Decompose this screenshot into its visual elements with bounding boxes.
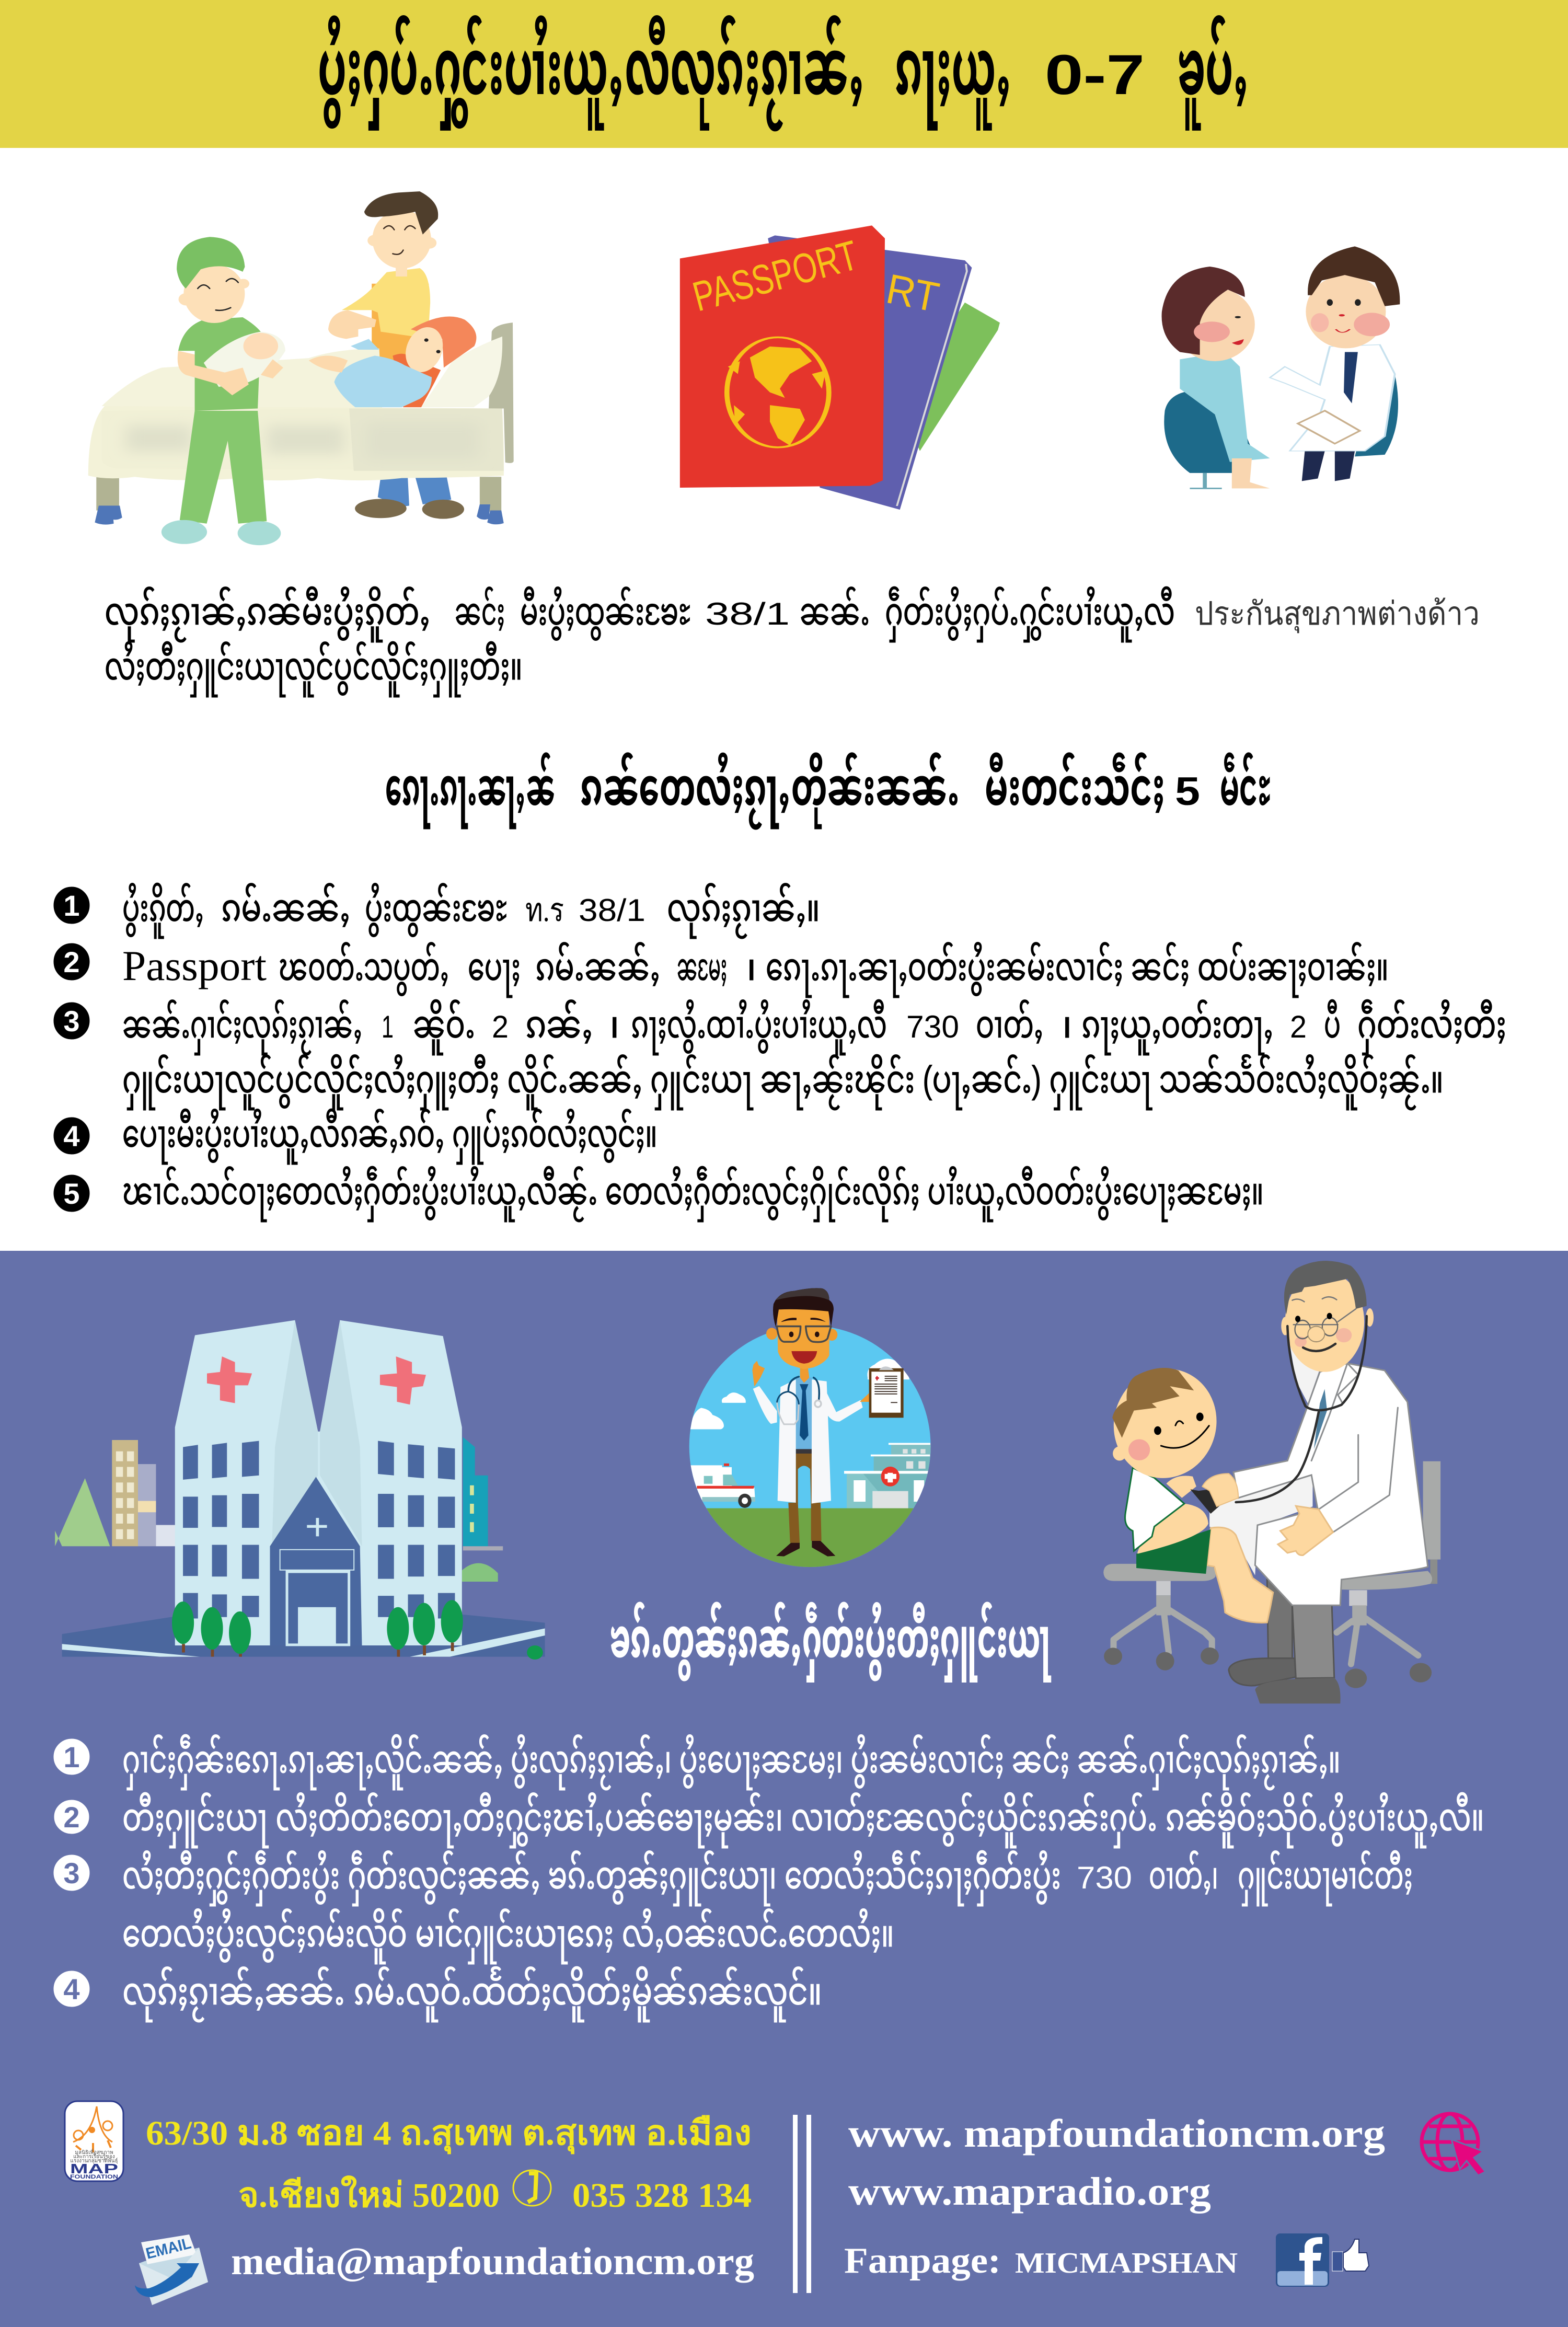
logo: MAP Foundation: FOUNDATION [70, 2174, 118, 2180]
text: RT [883, 265, 943, 321]
icon: email: EMAIL [144, 2234, 193, 2263]
step 3: 3 [63, 1857, 80, 1890]
item 2: 2 [63, 946, 80, 978]
websites [848, 2112, 1385, 2214]
logo: MAP Foundation: แรงงานกลุ่มชาติพันธุ์ [70, 2158, 118, 2164]
text block: intro paragraph: ႁဵတ်းပွႆႈႁပ်ႉႁွင်းပၢႆးယူႇလီ [885, 587, 1175, 642]
item 1: ท.ร [525, 893, 564, 928]
item 5 [54, 1167, 1264, 1222]
text block: intro paragraph: လႆႈတီႈႁူင်းယႃလူင်ပွင်လိူင်ႈႁူႈတီႈ။ [105, 642, 523, 697]
item 3: ၊ [1062, 1004, 1072, 1046]
divider [793, 2115, 811, 2293]
list: hospital steps [54, 1735, 1484, 2022]
step 3: လႆႈတီႈႁွင်ႈႁဵတ်းပွႆး ႁဵတ်းလွင်ႈၼၼ်ႇ ၶၵ်ႉတွၼ်ႈႁူင်းယႃ၊ တေလႆႈသဵင်ႈၵႃႈႁဵတ်းပွႆး [122, 1851, 1061, 1906]
title: ပွႆႈႁပ်ႉႁွင်းပၢႆးယူႇလီလုၵ်ႈၵႂၢၼ်ႇ [318, 14, 865, 132]
item 3: ၵႃႈလွႆႉထၢႆႉပွႆးပၢႆးယူႇလီ [631, 1000, 887, 1055]
item 4 [54, 1109, 658, 1164]
heading: documents required [385, 752, 1270, 830]
step 1 [54, 1735, 1341, 1790]
item 3: 1 [382, 1009, 394, 1044]
panel: title banner [0, 0, 1568, 148]
text block: intro paragraph: ၼင်ႈ [455, 587, 505, 633]
item 2: Passport [122, 942, 267, 989]
illustration: patient consulting doctor [1162, 246, 1400, 488]
item 2 [54, 942, 1389, 997]
title: ၵႃႈယူႇ [895, 23, 1012, 131]
icon: email [135, 2234, 208, 2305]
heading: documents required: ၵေႃႉၵႃႉၼႃႇၼ် [385, 752, 555, 830]
fanpage: Fanpage: [844, 2241, 1001, 2281]
logo: MAP Foundation: MAP [70, 2161, 118, 2176]
step 3: 730 [1077, 1860, 1132, 1895]
text block: intro paragraph: ประกันสุขภาพต่างด้าว [1195, 596, 1480, 633]
fanpage [844, 2241, 1238, 2281]
item 4: ပေႃးမီးပွႆးပၢႆးယူႇလီၵၼ်ႇၵဝ်ႇ ႁူပ်ႈၵဝ်လႆႈလွင်ႈ။ [122, 1109, 658, 1164]
icon: globe with cursor [1422, 2114, 1485, 2175]
step 2: 2 [63, 1801, 80, 1834]
icon: telephone [513, 2170, 551, 2206]
heading: hospital process: ၶၵ်ႉတွၼ်ႈၵၼ်ႇႁဵတ်းပွႆးတီႈႁူင်းယႃ [610, 1602, 1051, 1683]
heading: documents required: မဵင်ႊ [1220, 752, 1270, 816]
heading: documents required: ၵၼ်တေလႆႈၵႂႃႇတိုၼ်းၼၼ်ႉ [580, 752, 960, 830]
text block: intro paragraph [105, 587, 1480, 697]
illustration: doctor in circle [689, 1288, 931, 1567]
item 2: ၽဝတ်ႉသပွတ်ႇ [279, 942, 449, 996]
step 3: တေလႆႈပွႆးလွင်ႈၵမ်းလိူဝ် မၢင်ႁူင်းယႃၵေႈ လႆႇဝၼ်းလင်ႉတေလႆႈ။ [122, 1909, 894, 1964]
text block: intro paragraph: ၼၼ်ႉ [800, 587, 870, 633]
title [318, 14, 1249, 132]
item 1: 1 [63, 889, 80, 922]
item 3: ၵႃႈယူႇဝတ်းတႃႇ [1081, 1000, 1273, 1055]
email address: media@mapfoundationcm.org [231, 2240, 754, 2283]
item 3: 730 [906, 1009, 959, 1044]
item 1: 38/1 [579, 893, 645, 928]
websites: www. mapfoundationcm.org [848, 2112, 1385, 2156]
title: 0-7 [1045, 43, 1145, 106]
item 3: ပီ [1324, 1000, 1341, 1046]
text: PASSPORT [688, 232, 862, 320]
item 3: 2 [1290, 1009, 1307, 1044]
item 3: ႁဵတ်းလႆႈတီႈ [1357, 1000, 1506, 1055]
item 2: ၼမႄႈ [677, 947, 727, 988]
item 2: ၵမ်ႉၼၼ်ႇ [535, 942, 660, 988]
icon: facebook like [1276, 2233, 1369, 2287]
item 2: ပေႃႈ [468, 947, 521, 997]
websites: www.mapradio.org [848, 2170, 1211, 2214]
item 3: ၼိူဝ်ႉ [413, 1000, 475, 1055]
item 1: ပွႆးၵိူတ်ႇ [122, 883, 204, 938]
illustration: doctor, father and mother with newborn at bed [88, 191, 514, 545]
title: ၶူပ်ႇ [1178, 14, 1249, 131]
step 4: 4 [63, 1973, 80, 2006]
address: 035 328 134 [572, 2176, 752, 2215]
step 4: လုၵ်ႈၵႂၢၼ်ႇၼၼ်ႉ ၵမ်ႉလူဝ်ႉထႅတ်ႈလိူတ်ႈမိူၼ်ၵၼ်းလူင်။ [122, 1967, 822, 2022]
step 3: ႁူင်းယႃမၢင်တီႈ [1238, 1851, 1413, 1906]
address: จ.เชียงใหม่ 50200 [238, 2174, 500, 2215]
logo: MAP Foundation [65, 2101, 123, 2181]
illustration: hospital building [55, 1320, 545, 1660]
item 3: ၵၼ်ႇ [525, 1000, 593, 1046]
item 4: 4 [63, 1120, 80, 1153]
heading: documents required: မီးတင်းသဵင်ႈ [985, 752, 1165, 816]
item 1: ၵမ်ႉၼၼ်ႇ [221, 883, 350, 929]
item 3: ၊ [609, 1004, 619, 1046]
address: 63/30 ม.8 ซอย 4 ถ.สุเทพ ต.สุเทพ อ.เมือง [146, 2114, 752, 2155]
item 3: 3 [63, 1005, 80, 1038]
step 1: 1 [63, 1741, 80, 1773]
step 4 [54, 1967, 822, 2022]
illustration: passports [680, 225, 1000, 510]
step 3 [54, 1851, 1413, 1964]
address [146, 2114, 752, 2215]
item 3: 2 [492, 1009, 509, 1044]
item 3: ၼၼ်ႉႁၢင်ႈလုၵ်ႈၵႂၢၼ်ႇ [122, 1000, 362, 1055]
item 3: ဝၢတ်ႇ [976, 1000, 1043, 1046]
item 1: လုၵ်ႈၵႂၢၼ်ႇ။ [667, 883, 820, 938]
illustration: doctor examining child [1103, 1261, 1440, 1703]
text block: intro paragraph: 38/1 [705, 596, 790, 631]
item 3 [54, 1000, 1506, 1110]
step 2 [54, 1793, 1484, 1848]
heading: documents required: 5 [1175, 769, 1200, 814]
fanpage: MICMAPSHAN [1015, 2247, 1238, 2279]
logo: MAP Foundation: และการเรียนรู้ของ [73, 2153, 115, 2160]
panel: blue background [0, 1251, 1568, 2327]
text block: intro paragraph: မီးပွႆႈထွၼ်းၶႄႊ [520, 587, 690, 640]
item 5: 5 [63, 1177, 80, 1210]
list: documents [54, 883, 1506, 1222]
item 2: ၊ [746, 947, 756, 988]
step 3: ဝၢတ်ႇ၊ [1149, 1851, 1218, 1897]
item 1 [54, 883, 820, 938]
item 1: ပွႆးထွၼ်းၶႄႊ [365, 883, 506, 937]
logo: MAP Foundation: มูลนิธิเพื่อสุขภาพ [75, 2148, 113, 2156]
text block: intro paragraph: လုၵ်ႈၵႂၢၼ်ႇၵၼ်မီးပွႆႈၵိူတ်ႇ [105, 587, 430, 642]
